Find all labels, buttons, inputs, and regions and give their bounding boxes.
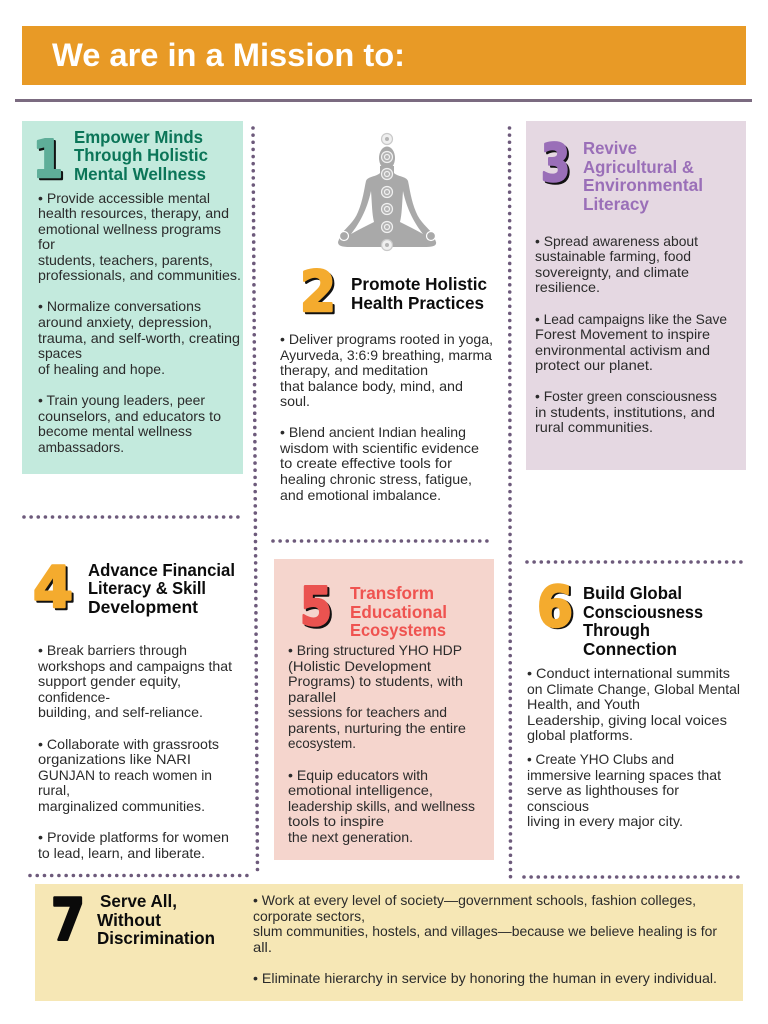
heading 2: Promote Holistic xyxy=(351,274,487,294)
body text 6: global platforms. xyxy=(527,727,633,743)
heading 7: Discrimination xyxy=(97,928,215,948)
body text 6: • Conduct international summits xyxy=(527,665,730,681)
body text 1 xyxy=(38,190,241,455)
body text 3: protect our planet. xyxy=(535,357,653,373)
body text 5: emotional intelligence, xyxy=(288,782,433,798)
body text 2: and emotional imbalance. xyxy=(280,487,441,503)
heading 5: Educational xyxy=(350,602,447,622)
body text 5: the next generation. xyxy=(288,829,413,845)
body text 5: parents, nurturing the entire xyxy=(288,720,466,736)
body text 1: become mental wellness xyxy=(38,423,192,439)
body text 1: of healing and hope. xyxy=(38,361,165,377)
number 7: 7 xyxy=(51,886,85,954)
body text 7: • Work at every level of society—government schools, fashion colleges, xyxy=(253,892,696,908)
number 2: 2 xyxy=(300,260,336,325)
body text 7: corporate sectors, xyxy=(253,908,365,924)
body text 3: rural communities. xyxy=(535,419,653,435)
heading 5 xyxy=(350,583,447,640)
body text 6: living in every major city. xyxy=(527,813,683,829)
body text 3: environmental activism and xyxy=(535,342,710,358)
body text 5: sessions for teachers and xyxy=(288,704,447,720)
body text 5: parallel xyxy=(288,689,336,705)
body text 4: workshops and campaigns that xyxy=(37,658,232,674)
panel: 5 educational ecosystems xyxy=(274,559,494,860)
body text 1: health resources, therapy, and xyxy=(38,205,229,221)
body text 1: ambassadors. xyxy=(38,439,124,455)
heading 6: Connection xyxy=(583,639,677,659)
body text 1: • Normalize conversations xyxy=(38,298,201,314)
heading 7: Without xyxy=(97,910,161,930)
heading 6 xyxy=(583,583,703,659)
body text 7: • Eliminate hierarchy in service by honoring the human in every individual. xyxy=(253,970,717,986)
body text 3: in students, institutions, and xyxy=(535,404,715,420)
body text 2: therapy, and meditation xyxy=(280,362,428,378)
body text 6: Leadership, giving local voices xyxy=(527,712,727,728)
body text 3 xyxy=(535,233,727,435)
heading 1: Mental Wellness xyxy=(74,164,206,184)
panel: 3 agricultural literacy xyxy=(526,121,746,470)
heading 7: Serve All, xyxy=(100,891,177,911)
number 3: 3 xyxy=(541,134,570,194)
heading 4 xyxy=(88,560,235,617)
body text 1: counselors, and educators to xyxy=(38,408,221,424)
heading 3: Literacy xyxy=(583,194,649,214)
body text 2: that balance body, mind, and xyxy=(280,378,463,394)
heading 1: Empower Minds xyxy=(74,127,203,147)
body text 7: all. xyxy=(253,939,272,955)
heading 2 xyxy=(351,274,487,313)
heading 3: Agricultural & xyxy=(583,157,694,177)
number 5: 5 xyxy=(300,577,332,638)
body text 5: tools to inspire xyxy=(288,813,384,829)
heading 6: Consciousness xyxy=(583,602,703,622)
body text 2 xyxy=(279,331,493,503)
body text 1: around anxiety, depression, xyxy=(38,314,212,330)
number 3: 3 xyxy=(543,136,572,196)
body text 2: to create effective tools for xyxy=(280,455,452,471)
body text 4: • Provide platforms for women xyxy=(38,829,229,845)
heading 3: Environmental xyxy=(583,175,703,195)
heading 3: Revive xyxy=(583,138,637,158)
heading 5: Transform xyxy=(350,583,434,603)
body text 2: • Deliver programs rooted in yoga, xyxy=(280,331,493,347)
body text 1: students, teachers, parents, xyxy=(38,252,213,268)
heading 5: Ecosystems xyxy=(350,620,446,640)
body text 4: • Collaborate with grassroots xyxy=(38,736,219,752)
heading 2: Health Practices xyxy=(351,293,484,313)
body text 1: spaces xyxy=(38,345,82,361)
number 6: 6 xyxy=(537,575,573,640)
number 5: 5 xyxy=(302,579,334,640)
body text 4: GUNJAN to reach women in xyxy=(38,767,212,783)
body text 4: rural, xyxy=(38,782,70,798)
body text 2: • Blend ancient Indian healing xyxy=(280,424,466,440)
heading 6: Build Global xyxy=(583,583,682,603)
body text 1: for xyxy=(38,236,55,252)
heading 7 xyxy=(97,891,215,948)
number 6: 6 xyxy=(539,576,575,641)
body text 3: Forest Movement to inspire xyxy=(535,326,710,342)
body text 6: Health, and Youth xyxy=(527,696,640,712)
body text 3: sovereignty, and climate xyxy=(535,264,689,280)
body text 6: on Climate Change, Global Mental xyxy=(527,681,740,697)
body text 1: professionals, and communities. xyxy=(38,267,241,283)
body text 5: ecosystem. xyxy=(288,735,356,751)
number 4: 4 xyxy=(33,555,73,621)
body text 3: resilience. xyxy=(535,279,600,295)
body text 5: leadership skills, and wellness xyxy=(288,798,475,814)
number 4: 4 xyxy=(35,557,75,623)
heading 4: Development xyxy=(88,597,198,617)
heading 1 xyxy=(74,127,208,184)
body text 6: immersive learning spaces that xyxy=(527,767,721,783)
body text 4: confidence- xyxy=(38,689,110,705)
panel: 2 holistic health xyxy=(279,260,493,503)
body text 2: healing chronic stress, fatigue, xyxy=(280,471,472,487)
body text 5: • Bring structured YHO HDP xyxy=(288,642,462,658)
body text 6: serve as lighthouses for xyxy=(527,782,679,798)
body text 4: • Break barriers through xyxy=(38,642,187,658)
body text 5: (Holistic Development xyxy=(288,658,431,674)
body text 3: • Foster green consciousness xyxy=(535,388,717,404)
panel: 1 mental wellness xyxy=(22,121,243,474)
body text 3: • Spread awareness about xyxy=(535,233,698,249)
panel: 7 serve all xyxy=(35,884,743,1001)
body text 4: building, and self-reliance. xyxy=(38,704,203,720)
panel: 6 global consciousness xyxy=(527,575,740,829)
heading 1: Through Holistic xyxy=(74,145,208,165)
heading 4: Literacy & Skill xyxy=(88,578,206,598)
body text 6: conscious xyxy=(527,798,589,814)
body text 3: sustainable farming, food xyxy=(535,248,691,264)
body text 4: organizations like NARI xyxy=(38,751,191,767)
body text 2: soul. xyxy=(280,393,310,409)
heading 6: Through xyxy=(583,620,650,640)
title banner xyxy=(22,26,746,85)
body text 1: emotional wellness programs xyxy=(38,221,221,237)
body text 1: • Provide accessible mental xyxy=(38,190,210,206)
body text 4 xyxy=(37,642,232,861)
heading 4: Advance Financial xyxy=(88,560,235,580)
body text 2: wisdom with scientific evidence xyxy=(279,440,479,456)
body text 4: support gender equity, xyxy=(38,673,181,689)
body text 1: • Train young leaders, peer xyxy=(38,392,205,408)
body text 5 xyxy=(288,642,475,845)
heading 3 xyxy=(583,138,703,214)
body text 3: • Lead campaigns like the Save xyxy=(535,311,727,327)
body text 1: trauma, and self-worth, creating xyxy=(38,330,240,346)
number 1: 1 xyxy=(33,130,63,190)
number 2: 2 xyxy=(302,262,338,327)
title banner: We are in a Mission to: xyxy=(52,37,405,73)
body text 6 xyxy=(527,665,740,829)
body text 7: slum communities, hostels, and villages—because we believe healing is for xyxy=(253,923,717,939)
body text 4: marginalized communities. xyxy=(38,798,205,814)
icon: meditating figure with chakras xyxy=(338,134,436,250)
body text 5: Programs) to students, with xyxy=(288,673,463,689)
body text 7 xyxy=(253,892,717,986)
body text 5: • Equip educators with xyxy=(288,767,428,783)
body text 6: • Create YHO Clubs and xyxy=(527,751,674,767)
panel: 4 financial literacy xyxy=(33,555,235,861)
body text 4: to lead, learn, and liberate. xyxy=(38,845,205,861)
number 1: 1 xyxy=(35,132,65,192)
body text 2: Ayurveda, 3:6:9 breathing, marma xyxy=(280,347,492,363)
